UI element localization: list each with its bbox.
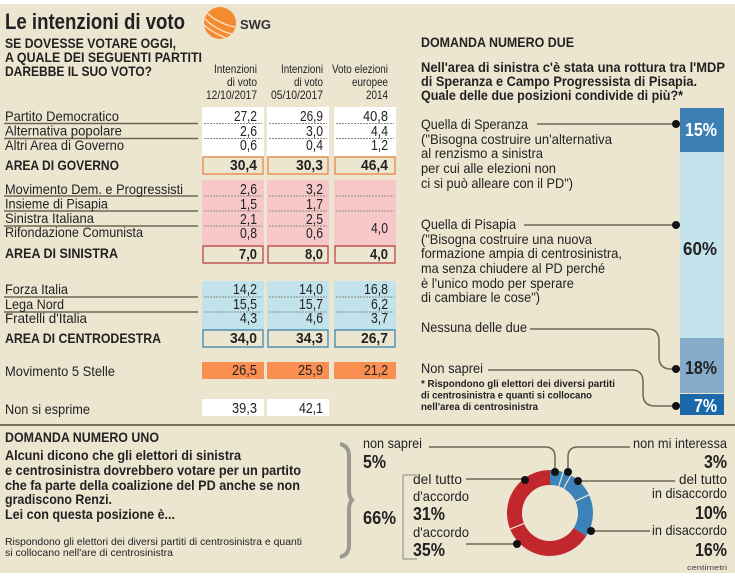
panel: area di governo: 3,0 [306, 124, 323, 140]
question text: di Speranza e Campo Progressista di Pisapia. [421, 73, 697, 89]
label: del tutto d'accordo [413, 471, 529, 524]
row: Non si esprime: Non si esprime [5, 401, 90, 417]
panel: area di governo: 30,4 [230, 158, 257, 174]
label: del tutto d'accordo: d'accordo [413, 488, 469, 504]
panel: area di governo: 0,6 [240, 138, 257, 154]
label: in disaccordo: 16% [695, 540, 727, 560]
panel: area di sinistra: 4,0 [370, 247, 388, 263]
icon: SWG logo: SWG [240, 17, 271, 32]
option: Speranza [421, 116, 680, 191]
stacked bar: 7% [694, 396, 717, 416]
icon: curly brace [340, 444, 352, 557]
panel: area di centrodestra: AREA DI CENTRODESTRA [5, 330, 161, 346]
question text: e centrosinistra dovrebbero votare per un partito [5, 462, 301, 478]
bracket [403, 475, 417, 559]
label: 66% total: 66% [363, 508, 396, 528]
label: non saprei: 5% [363, 452, 386, 472]
panel: area di centrodestra: 34,3 [296, 331, 323, 347]
panel: area di governo: Partito Democratico [5, 108, 119, 124]
panel: area di governo: 2,6 [240, 124, 257, 140]
panel: area di sinistra: 1,7 [306, 197, 323, 213]
panel: area di centrodestra: 14,2 [233, 282, 257, 298]
question text: Quale delle due posizioni condivide di più?* [421, 87, 683, 103]
footnote: nell'area di centrosinistra [421, 401, 538, 413]
question heading: A QUALE DEI SEGUENTI PARTITI [5, 49, 202, 65]
option: Pisapia: ("Bisogna costruire una nuova [421, 231, 592, 247]
panel: area di sinistra: 0,8 [240, 226, 257, 242]
option: Speranza: al renzismo a sinistra [421, 145, 543, 161]
panel: area di centrodestra [4, 281, 396, 347]
panel: area di governo: 40,8 [363, 109, 388, 125]
note: Rispondono gli elettori dei diversi partiti di centrosinistra e quanti [5, 536, 302, 548]
panel: area di sinistra: Rifondazione Comunista [5, 224, 143, 240]
label: del tutto in disaccordo: in disaccordo [652, 485, 727, 501]
label: d'accordo: 35% [413, 540, 445, 560]
panel: area di governo: 46,4 [361, 158, 388, 174]
panel: area di sinistra: 2,5 [306, 212, 323, 228]
label: in disaccordo [587, 522, 727, 560]
column headers: Voto elezioni [332, 62, 388, 76]
label: in disaccordo: in disaccordo [652, 522, 727, 538]
heading: domanda due: DOMANDA NUMERO DUE [421, 34, 574, 50]
panel: area di centrodestra: Lega Nord [5, 296, 64, 312]
option: Pisapia: di cambiare le cose") [421, 289, 540, 305]
column headers: di voto [227, 75, 257, 89]
panel: area di governo: 26,9 [300, 109, 323, 125]
column headers: 05/10/2017 [271, 88, 323, 102]
panel: domanda numero uno [5, 429, 302, 559]
note: si collocano nell'are di centrosinistra [5, 547, 173, 559]
option: Speranza: ("Bisogna costruire un'alternativa [421, 131, 612, 147]
row: Movimento 5 Stelle [5, 362, 396, 379]
panel: area di sinistra: 7,0 [239, 247, 257, 263]
row: Non si esprime: 42,1 [299, 401, 323, 417]
donut chart [509, 471, 590, 548]
row: Movimento 5 Stelle: 21,2 [364, 363, 388, 379]
footnote: * Rispondono gli elettori dei diversi partiti [421, 378, 615, 390]
column headers: 2014 [366, 88, 388, 102]
panel: area di sinistra: AREA DI SINISTRA [5, 245, 118, 261]
panel: area di centrodestra: 15,7 [299, 297, 323, 313]
column headers [206, 62, 388, 102]
column headers: Intenzioni [214, 62, 257, 76]
option: Non saprei [421, 360, 680, 410]
column headers: europee [352, 75, 388, 89]
option: Nessuna delle due [421, 319, 680, 373]
row: Non si esprime [5, 399, 329, 417]
panel: area di sinistra: 4,0 [371, 221, 388, 237]
row: Non si esprime: 39,3 [232, 401, 257, 417]
row: Movimento 5 Stelle: 26,5 [232, 363, 257, 379]
stacked bar [680, 108, 724, 416]
row: Movimento 5 Stelle: 25,9 [298, 363, 323, 379]
note [5, 536, 302, 559]
panel: area di governo: 4,4 [371, 124, 388, 140]
panel: area di governo: 1,2 [371, 138, 388, 154]
panel: area di centrodestra: Fratelli d'Italia [5, 310, 87, 326]
panel: area di governo: Altri Area di Governo [5, 137, 124, 153]
label: non mi interessa: 3% [704, 452, 727, 472]
panel: area di centrodestra: 4,3 [240, 311, 257, 327]
panel: area di centrodestra: 4,6 [306, 311, 323, 327]
panel: area di sinistra: 0,6 [306, 226, 323, 242]
panel: area di centrodestra: 34,0 [230, 331, 257, 347]
stacked bar: 15% [685, 120, 717, 140]
option: Nessuna delle due: Nessuna delle due [421, 319, 527, 335]
label: non saprei [363, 435, 559, 476]
question text: Alcuni dicono che gli elettori di sinistra [5, 447, 241, 463]
panel: area di centrodestra: Forza Italia [5, 281, 68, 297]
title: Le intenzioni di voto [5, 9, 185, 34]
question heading: SE DOVESSE VOTARE OGGI, [5, 35, 176, 51]
option: Pisapia: è l'unico modo per sperare [421, 275, 574, 291]
question heading [5, 35, 202, 79]
option: Non saprei: Non saprei [421, 360, 483, 376]
label: non saprei: non saprei [363, 435, 422, 451]
panel: area di centrodestra: 16,8 [364, 282, 388, 298]
question text: che fa parte della coalizione del PD anche se non [5, 477, 300, 493]
option: Speranza: per cui alle elezioni non [421, 160, 556, 176]
column headers: Intenzioni [281, 62, 323, 76]
option: Speranza: Quella di Speranza [421, 116, 528, 132]
panel: area di sinistra: Sinistra Italiana [5, 210, 94, 226]
label: non mi interessa: non mi interessa [633, 435, 727, 451]
label: d'accordo: d'accordo [413, 524, 469, 540]
row: Movimento 5 Stelle: Movimento 5 Stelle [5, 363, 115, 379]
heading: domanda uno: DOMANDA NUMERO UNO [5, 429, 159, 445]
panel: area di sinistra: 3,2 [306, 182, 323, 198]
panel: area di governo: 30,3 [296, 158, 323, 174]
question text [421, 59, 725, 103]
panel: domanda numero due [421, 34, 725, 416]
question text: gradiscono Renzi. [5, 491, 112, 507]
stacked bar: 60% [683, 239, 717, 259]
option: Pisapia: formazione ampia di centrosinistra, [421, 245, 622, 261]
panel: area di sinistra: 8,0 [305, 247, 323, 263]
question text: Lei con questa posizione è... [5, 506, 175, 522]
panel: area di sinistra: Insieme di Pisapia [5, 196, 108, 212]
panel: area di governo: 27,2 [234, 109, 257, 125]
column headers: di voto [294, 75, 323, 89]
question text [5, 447, 301, 522]
label: del tutto d'accordo: del tutto [413, 471, 462, 487]
panel: area di sinistra [4, 180, 396, 263]
panel: area di governo: Alternativa popolare [5, 122, 122, 138]
panel: area di sinistra: Movimento Dem. e Progressisti [5, 181, 183, 197]
label: del tutto in disaccordo: 10% [695, 503, 727, 523]
panel: area di governo: 0,4 [306, 138, 323, 154]
panel: area di centrodestra: 15,5 [233, 297, 257, 313]
option: Pisapia: Quella di Pisapia [421, 216, 516, 232]
panel: area di sinistra: 2,1 [240, 212, 257, 228]
label: del tutto in disaccordo [574, 471, 727, 523]
icon: SWG logo [204, 7, 271, 39]
option: Pisapia: ma senza chiudere al PD perché [421, 260, 605, 276]
label: del tutto in disaccordo: del tutto [679, 471, 727, 487]
credit: centimetri: centimetri [687, 563, 727, 572]
option: Pisapia [421, 216, 680, 305]
panel: area di sinistra: 2,6 [240, 182, 257, 198]
panel: area di governo [4, 107, 396, 174]
footnote [421, 378, 615, 413]
panel: area di governo: AREA DI GOVERNO [5, 157, 119, 173]
column headers: 12/10/2017 [206, 88, 257, 102]
panel: area di centrodestra: 14,0 [299, 282, 323, 298]
panel: area di centrodestra: 6,2 [371, 297, 388, 313]
question heading: DAREBBE IL SUO VOTO? [5, 63, 152, 79]
panel: area di sinistra: 1,5 [240, 197, 257, 213]
footnote: di centrosinistra e quanti si collocano [421, 390, 592, 402]
label: del tutto d'accordo: 31% [413, 504, 445, 524]
panel: area di centrodestra: 26,7 [361, 331, 388, 347]
option: Speranza: ci si può alleare con il PD") [421, 175, 573, 191]
panel: area di centrodestra: 3,7 [371, 311, 388, 327]
label: d'accordo [413, 524, 521, 560]
label: non mi interessa [564, 435, 727, 476]
stacked bar: 18% [685, 358, 717, 378]
